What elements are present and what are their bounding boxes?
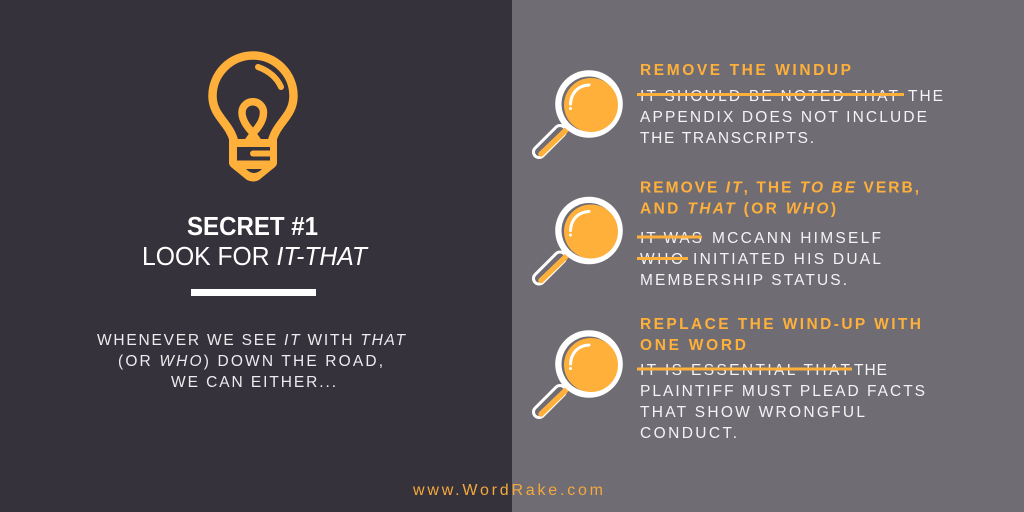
panel: tip 1 remove the windup <box>637 62 943 147</box>
panel: tip 2 remove it, to be, that: WHO <box>640 251 683 268</box>
panel: tip 2 remove it, to be, that: INITIATED HIS DUAL <box>693 251 881 268</box>
icon: magnifying glass 2 <box>539 197 623 280</box>
footer: website: www.WordRake.com <box>412 482 603 499</box>
panel: tip 3 replace the wind-up: PLAINTIFF MUST PLEAD FACTS <box>640 383 925 400</box>
panel: tip 1 remove the windup: IT SHOULD BE NOTED THAT <box>640 88 899 105</box>
panel: tip 1 remove the windup: APPENDIX DOES NOT INCLUDE <box>640 109 927 126</box>
panel: tip 3 replace the wind-up: ONE WORD <box>640 337 746 354</box>
panel: tip 1 remove the windup: THE TRANSCRIPTS. <box>640 130 814 147</box>
icon: magnifying glass 1 <box>539 70 623 154</box>
panel: tip 3 replace the wind-up: IT IS ESSENTIAL THAT <box>640 362 851 379</box>
panel: tip 3 replace the wind-up: THAT SHOW WRONGFUL <box>640 404 865 421</box>
panel: tip 3 replace the wind-up: THE <box>854 362 887 379</box>
panel: tip 3 replace the wind-up: CONDUCT. <box>640 425 737 442</box>
divider bar <box>191 289 316 296</box>
panel: right grey background <box>512 0 1024 512</box>
panel: tip 2 remove it, to be, that: MCCANN HIMSELF <box>712 230 881 247</box>
panel: tip 2 remove it, to be, that <box>637 180 919 289</box>
text block: intro <box>97 332 407 391</box>
panel: tip 2 remove it, to be, that: REMOVE IT, THE TO BE VERB, <box>640 180 919 196</box>
panel: tip 2 remove it, to be, that: AND THAT (OR WHO) <box>640 200 836 218</box>
icon: light bulb <box>212 56 294 182</box>
panel: tip 3 replace the wind-up: REPLACE THE WIND-UP WITH <box>640 316 921 333</box>
panel: tip 3 replace the wind-up <box>637 316 925 442</box>
heading: Look for It-That: LOOK FOR IT-THAT <box>142 241 369 271</box>
text block: intro: WE CAN EITHER... <box>171 374 336 391</box>
text block: intro: WHENEVER WE SEE IT WITH THAT <box>97 332 407 349</box>
heading: Secret #1: SECRET #1 <box>187 211 318 241</box>
panel: left dark background <box>0 0 512 512</box>
panel: tip 1 remove the windup: REMOVE THE WINDUP <box>640 62 851 79</box>
text block: intro: (OR WHO) DOWN THE ROAD, <box>118 353 383 370</box>
icon: magnifying glass 3 <box>539 330 623 414</box>
panel: tip 2 remove it, to be, that: MEMBERSHIP STATUS. <box>640 272 847 289</box>
panel: tip 1 remove the windup: THE <box>908 88 943 105</box>
panel: tip 2 remove it, to be, that: IT WAS <box>640 230 702 247</box>
